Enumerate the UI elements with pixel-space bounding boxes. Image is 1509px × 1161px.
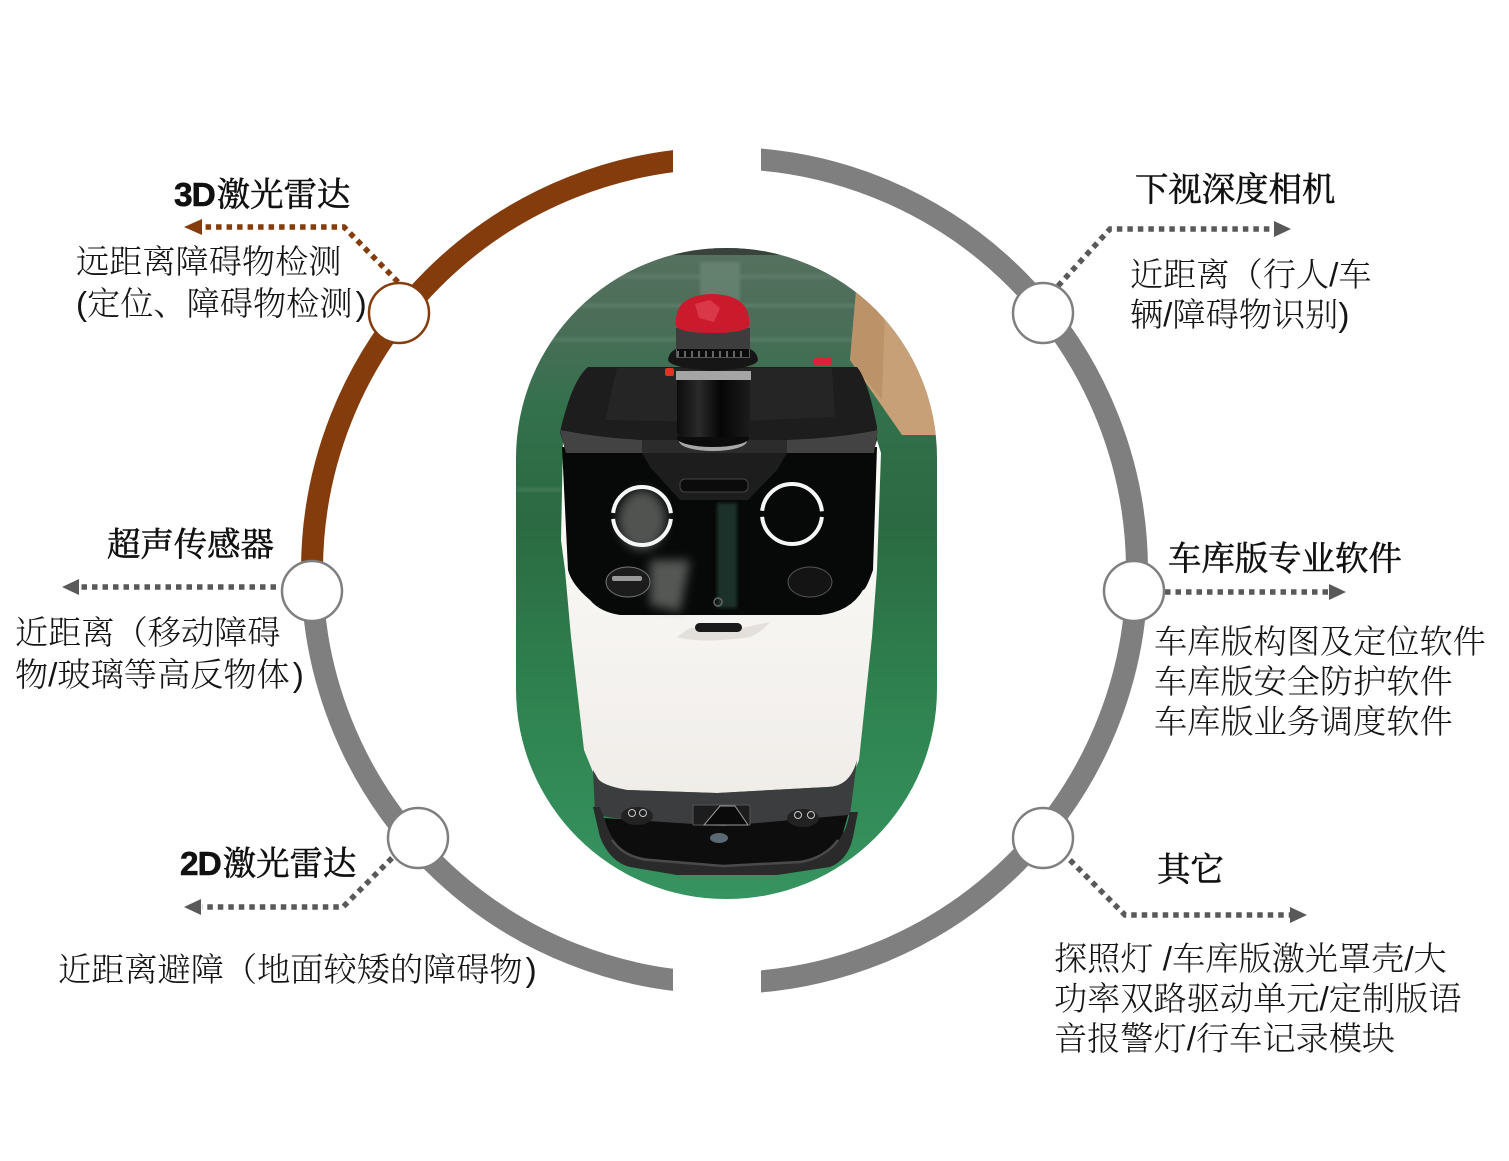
text: 3D LiDAR description: (定位、障碍物检测): [76, 286, 367, 323]
text: others description: 音报警灯/行车记录模块: [1054, 1021, 1395, 1058]
text: others description: 功率双路驱动单元/定制版语: [1054, 981, 1461, 1018]
text: ultrasonic description: 近距离（移动障碍: [15, 615, 280, 652]
heading: 3D LiDAR: 3D激光雷达: [174, 177, 350, 214]
text: depot software list: 车库版构图及定位软件: [1154, 624, 1486, 661]
ring: right grey arc: [761, 148, 1148, 992]
text: depot software list: [1154, 624, 1486, 741]
heading: others: 其它: [1157, 852, 1224, 889]
heading: ultrasonic sensor: 超声传感器: [107, 527, 274, 564]
text: others description: 探照灯 /车库版激光罩壳/大: [1054, 941, 1447, 978]
body white: [561, 440, 881, 793]
base: [593, 760, 857, 826]
heading: depot software: 车库版专业软件: [1168, 541, 1402, 578]
lid: [560, 367, 877, 500]
black face: [562, 447, 877, 615]
text: 3D LiDAR description: 远距离障碍物检测: [76, 244, 342, 281]
robot photo: [516, 248, 945, 899]
heading: 2D LiDAR: 2D激光雷达: [180, 846, 356, 883]
text: 2D LiDAR description: 近距离避障（地面较矮的障碍物): [58, 952, 537, 989]
ring: lower left grey arc: [304, 619, 673, 991]
LED rings: [613, 487, 671, 545]
text: depth camera description: 辆/障碍物识别): [1130, 297, 1349, 334]
lidar: [679, 441, 747, 451]
text: depth camera description: 近距离（行人/车: [1130, 257, 1372, 294]
text: depot software list: 车库版安全防护软件: [1154, 664, 1453, 701]
text: ultrasonic description: 物/玻璃等高反物体): [15, 656, 304, 694]
heading: downward depth camera: 下视深度相机: [1135, 172, 1335, 209]
text: depot software list: 车库版业务调度软件: [1154, 704, 1453, 741]
text: ultrasonic description: [15, 615, 304, 694]
text: depth camera description: [1130, 257, 1372, 334]
text: others description: [1054, 941, 1461, 1058]
ring: brown arc: [301, 150, 673, 562]
ring and robot diagram: [301, 148, 1148, 992]
text: 3D LiDAR description: [76, 244, 367, 323]
